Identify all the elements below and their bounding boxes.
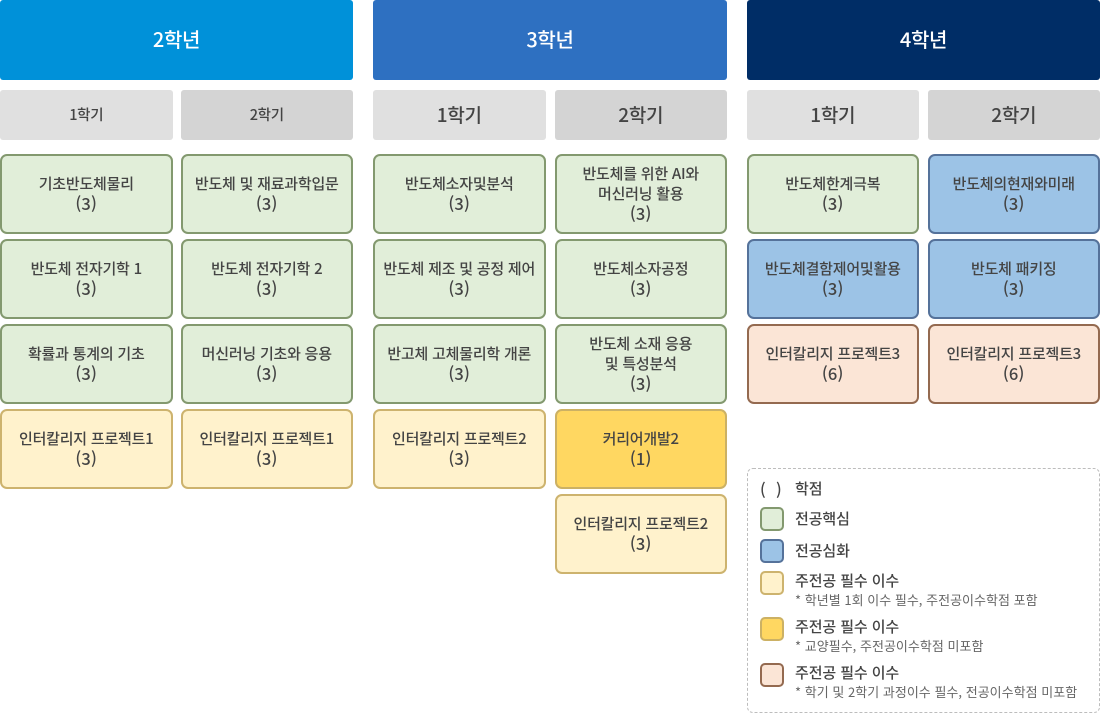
course: 반도체 및 재료과학입문: (3)	[256, 191, 278, 215]
semester: 2학년 1학기	[0, 90, 172, 140]
legend label: 전공심화: 전공심화	[795, 540, 850, 561]
legend swatch: 주전공 필수 이수 (연노랑)	[760, 571, 784, 595]
course: 반도체결함제어및활용: 반도체결함제어및활용	[765, 258, 901, 279]
legend note: 학년별 1회: * 학년별 1회 이수 필수, 주전공이수학점 포함	[795, 590, 1038, 609]
legend swatch: 주전공 필수 이수 (살구)	[760, 663, 784, 687]
course: 인터칼리지 프로젝트3	[746, 324, 919, 404]
legend: credits: 학점	[795, 478, 822, 499]
semester: 4학년 1학기: 1학기	[810, 101, 855, 128]
course: 인터칼리지 프로젝트2	[373, 409, 546, 489]
header: 4학년: 4학년	[900, 24, 947, 53]
course: 머신러닝 기초와 응용	[180, 324, 353, 404]
legend note: 교양필수: * 교양필수, 주전공이수학점 미포함	[795, 636, 983, 655]
course: 반도체 패키징: 반도체 패키징	[971, 258, 1056, 279]
course: 머신러닝 기초와 응용: (3)	[256, 361, 278, 385]
course: 인터칼리지 프로젝트1	[0, 409, 172, 489]
course: 인터칼리지 프로젝트1: 인터칼리지 프로젝트1	[19, 428, 154, 449]
course: 인터칼리지 프로젝트3: (6)	[1003, 361, 1025, 385]
course: 반도체소자공정: 반도체소자공정	[593, 258, 688, 279]
course: 기초반도체물리: (3)	[75, 191, 97, 215]
semester: 3학년 2학기: 2학기	[618, 101, 663, 128]
course: 기초반도체물리: 기초반도체물리	[39, 173, 134, 194]
course: 커리어개발2: 커리어개발2	[603, 428, 679, 449]
course: 반도체소자및분석: 반도체소자및분석	[405, 173, 514, 194]
course: 반도체 및 재료과학입문	[180, 154, 353, 234]
semester: 3학년 1학기	[373, 90, 546, 140]
course: 반도체 소재 응용 및 특성분석: 및 특성분석	[605, 353, 677, 374]
header: 2학년	[0, 0, 353, 80]
course: 반도체소자및분석	[373, 154, 546, 234]
course: 반도체 패키징: (3)	[1003, 276, 1025, 300]
course: 반도체소자공정	[554, 239, 727, 319]
semester: 4학년 1학기	[746, 90, 919, 140]
course: 인터칼리지 프로젝트1	[180, 409, 353, 489]
course: 반도체를 위한 AI와 머신러닝 활용: 머신러닝 활용	[598, 183, 683, 204]
course: 반도체의현재와미래: (3)	[1003, 191, 1025, 215]
legend label: 주전공 필수 이수: 주전공 필수 이수	[795, 616, 899, 637]
course: 반도체 패키징	[928, 239, 1100, 319]
legend label: 전공핵심: 전공핵심	[795, 508, 850, 529]
semester: 2학년 2학기: 2학기	[250, 104, 284, 125]
header: 3학년: 3학년	[526, 24, 574, 53]
course: 반도체의현재와미래: 반도체의현재와미래	[953, 173, 1075, 194]
legend label: 주전공 필수 이수: 주전공 필수 이수	[795, 662, 899, 683]
course: 반도체소자및분석: (3)	[448, 191, 470, 215]
course: 인터칼리지 프로젝트1: (3)	[256, 446, 278, 470]
course: 반도체 전자기학 1	[0, 239, 172, 319]
legend swatch: 전공핵심	[760, 507, 784, 531]
legend label: 주전공 필수 이수: 주전공 필수 이수	[795, 570, 899, 591]
course: 반도체한계극복: (3)	[822, 191, 844, 215]
course: 반고체 고체물리학 개론: (3)	[448, 361, 470, 385]
course: 반고체 고체물리학 개론	[373, 324, 546, 404]
course: 커리어개발2: (1)	[630, 446, 652, 470]
course: 반도체 제조 및 공정 제어: (3)	[448, 276, 470, 300]
course: 반도체 소재 응용 및 특성분석: 반도체 소재 응용	[589, 333, 692, 354]
legend note: 학기 및 2학기: * 학기 및 2학기 과정이수 필수, 전공이수학점 미포함	[795, 682, 1077, 701]
course: 반도체한계극복	[746, 154, 919, 234]
course: 인터칼리지 프로젝트3: (6)	[822, 361, 844, 385]
course: 커리어개발2	[554, 409, 727, 489]
header: 2학년: 2학년	[153, 24, 200, 53]
semester: 4학년 2학기	[928, 90, 1100, 140]
course: 반도체 전자기학 2	[180, 239, 353, 319]
course: 인터칼리지 프로젝트1: 인터칼리지 프로젝트1	[199, 428, 334, 449]
semester: 4학년 2학기: 2학기	[991, 101, 1036, 128]
course: 반도체 전자기학 2: (3)	[256, 276, 278, 300]
course: 반도체 및 재료과학입문: 반도체 및 재료과학입문	[195, 173, 339, 194]
course: 반도체를 위한 AI와 머신러닝 활용	[554, 154, 727, 234]
course: 확률과 통계의 기초: (3)	[75, 361, 97, 385]
course: 반도체 전자기학 1: (3)	[75, 276, 97, 300]
legend swatch: 주전공 필수 이수 (노랑)	[760, 617, 784, 641]
course: 반도체 소재 응용 및 특성분석: (3)	[630, 371, 652, 395]
semester: 2학년 2학기	[180, 90, 353, 140]
legend swatch: 전공심화	[760, 539, 784, 563]
legend	[747, 468, 1100, 713]
semester: 3학년 2학기	[554, 90, 727, 140]
course: 인터칼리지 프로젝트2	[554, 494, 727, 574]
semester: 3학년 1학기: 1학기	[437, 101, 482, 128]
legend: credits: (	[760, 477, 766, 501]
course: 확률과 통계의 기초	[0, 324, 172, 404]
course: 인터칼리지 프로젝트3	[928, 324, 1100, 404]
course: 반도체 소재 응용 및 특성분석	[554, 324, 727, 404]
header: 3학년	[373, 0, 727, 80]
semester: 2학년 1학기: 1학기	[69, 104, 103, 125]
course: 반도체한계극복: 반도체한계극복	[785, 173, 880, 194]
course: 반고체 고체물리학 개론: 반고체 고체물리학 개론	[387, 343, 531, 364]
course: 반도체 전자기학 1: 반도체 전자기학 1	[31, 258, 142, 279]
course: 반도체결함제어및활용: (3)	[822, 276, 844, 300]
course: 확률과 통계의 기초: 확률과 통계의 기초	[28, 343, 145, 364]
course: 반도체를 위한 AI와 머신러닝 활용: (3)	[630, 201, 652, 225]
header: 4학년	[747, 0, 1100, 80]
course: 인터칼리지 프로젝트2: 인터칼리지 프로젝트2	[573, 513, 708, 534]
course: 반도체를 위한 AI와 머신러닝 활용: 반도체를 위한 AI와	[582, 163, 699, 184]
course: 기초반도체물리	[0, 154, 172, 234]
course: 반도체 전자기학 2: 반도체 전자기학 2	[211, 258, 322, 279]
course: 인터칼리지 프로젝트3: 인터칼리지 프로젝트3	[946, 343, 1081, 364]
course: 인터칼리지 프로젝트1: (3)	[75, 446, 97, 470]
course: 인터칼리지 프로젝트2: (3)	[630, 531, 652, 555]
course: 인터칼리지 프로젝트2: (3)	[448, 446, 470, 470]
course: 반도체의현재와미래	[928, 154, 1100, 234]
course: 반도체 제조 및 공정 제어: 반도체 제조 및 공정 제어	[383, 258, 535, 279]
legend: credits	[760, 477, 822, 501]
course: 인터칼리지 프로젝트2: 인터칼리지 프로젝트2	[392, 428, 527, 449]
course: 머신러닝 기초와 응용: 머신러닝 기초와 응용	[202, 343, 332, 364]
course: 반도체결함제어및활용	[746, 239, 919, 319]
course: 인터칼리지 프로젝트3: 인터칼리지 프로젝트3	[765, 343, 900, 364]
course: 반도체소자공정: (3)	[630, 276, 652, 300]
course: 반도체 제조 및 공정 제어	[373, 239, 546, 319]
legend: credits: )	[776, 477, 782, 501]
